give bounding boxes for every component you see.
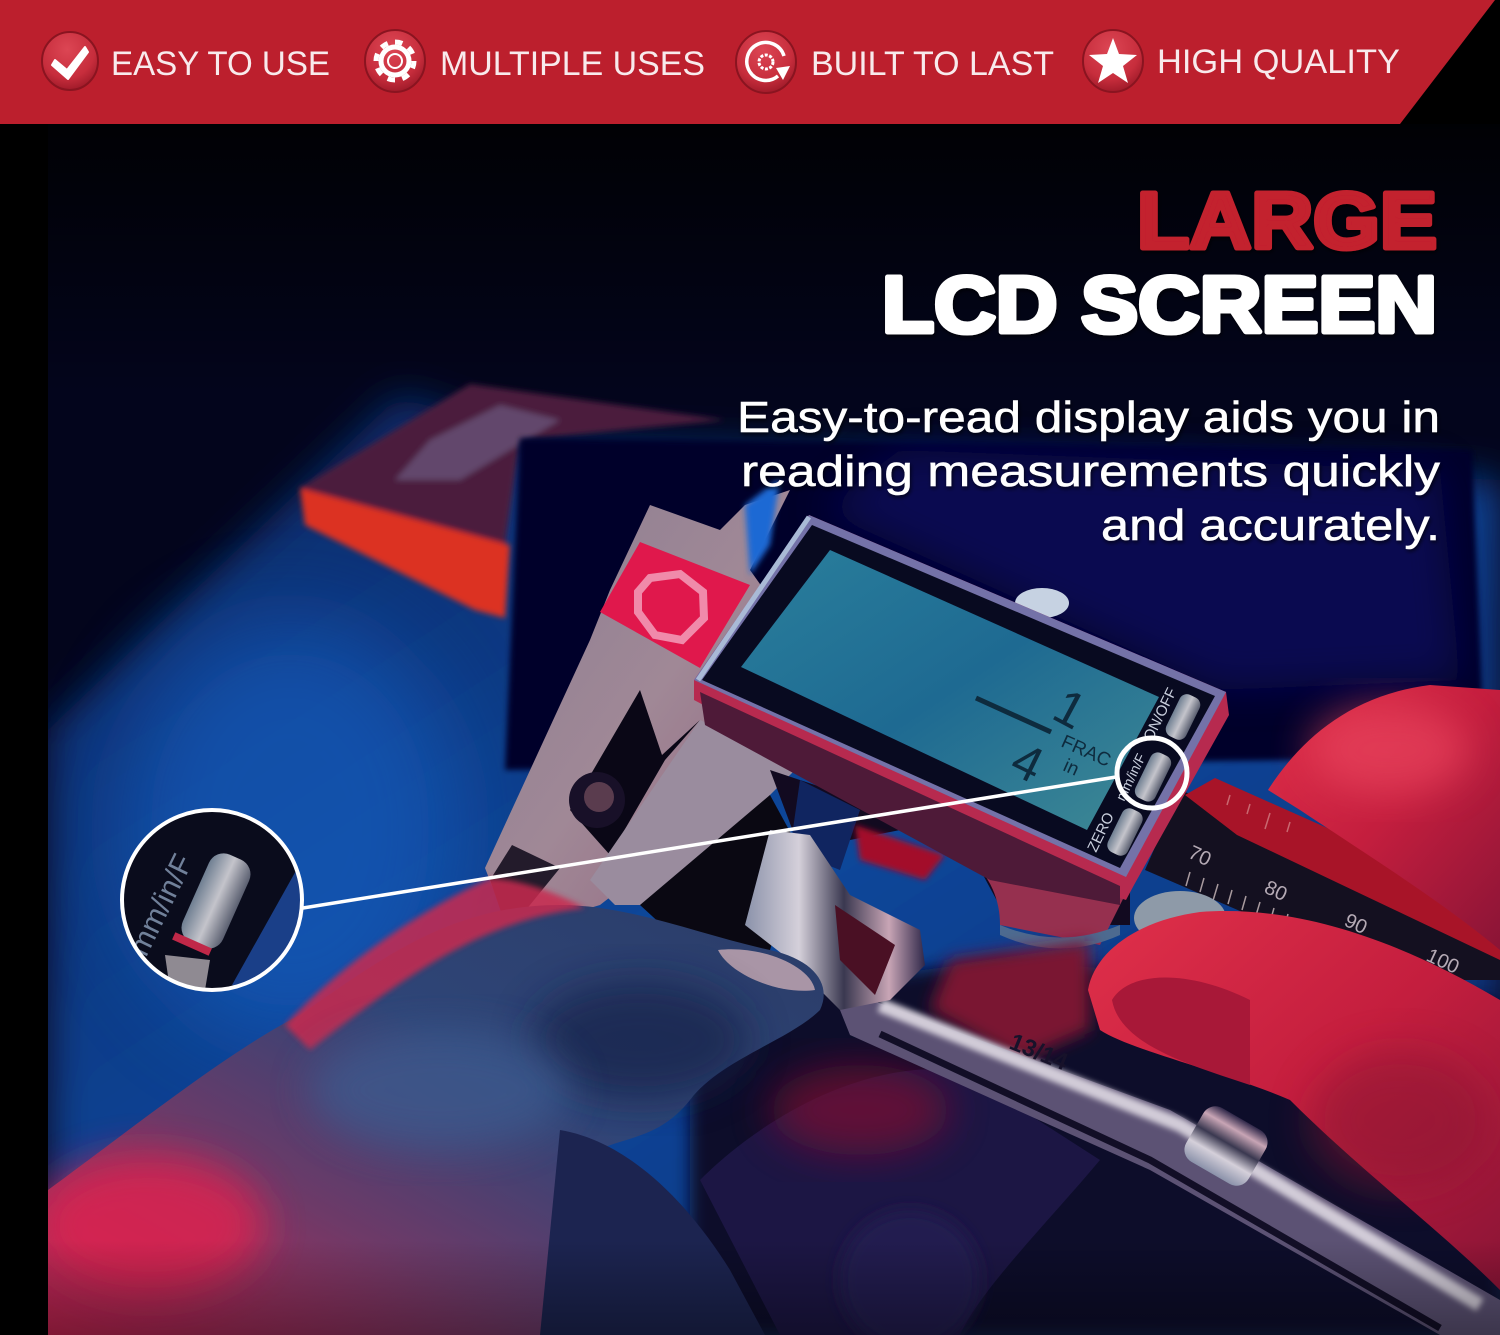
index finger red bbox=[285, 878, 585, 1050]
label: multiple uses: MULTIPLE USES bbox=[440, 45, 705, 83]
heading words LCD SCREEN: LCD SCREEN bbox=[882, 260, 1437, 349]
LCD units: in bbox=[1060, 755, 1082, 781]
ruler numbers: 70 bbox=[1185, 842, 1214, 871]
red box background bbox=[300, 384, 725, 618]
dark lower hand bbox=[700, 1065, 1100, 1335]
locking screw bbox=[569, 772, 625, 828]
bottom shadow over photo bbox=[48, 1240, 1500, 1335]
red logo band bbox=[600, 542, 750, 668]
black case behind caliper bbox=[505, 438, 1482, 770]
dark backdrop bbox=[48, 167, 1500, 1190]
ruler numbers: 90 bbox=[1341, 910, 1370, 939]
thumb shade bbox=[1310, 1050, 1490, 1190]
inset mode label: mm/in/F bbox=[123, 849, 200, 961]
lower hand red glow bbox=[770, 1065, 950, 1155]
palm shadow bbox=[530, 980, 750, 1100]
slide curved foot bbox=[986, 878, 1123, 945]
case navy sheen bbox=[820, 450, 1460, 690]
inset background bbox=[122, 810, 302, 990]
ruler numbers: 100 bbox=[1423, 945, 1462, 979]
inset metal foot bbox=[165, 955, 210, 990]
heading word LARGE: LARGE bbox=[1137, 176, 1437, 265]
description text: and accurately. bbox=[1101, 501, 1440, 550]
upper finger highlight bbox=[1310, 705, 1470, 795]
ruler ticks on red bbox=[1227, 795, 1290, 832]
inset right edge bbox=[232, 860, 320, 990]
LCD reading bbox=[1012, 693, 1081, 782]
lower right dark shadow bbox=[690, 960, 1500, 1335]
blue gap below display bbox=[790, 780, 860, 870]
centre blue glow bbox=[310, 1030, 570, 1150]
LCD fraction line bbox=[976, 698, 1051, 732]
magnified button inset bbox=[122, 810, 320, 990]
rim left highlight bbox=[698, 517, 809, 680]
ruler numbers bbox=[1185, 842, 1462, 979]
red ruler strip bbox=[1185, 778, 1500, 960]
inset button bbox=[176, 848, 256, 954]
lower finger bbox=[540, 1130, 765, 1335]
shaft dark line bbox=[880, 1034, 1440, 1328]
housing rim bbox=[694, 515, 1226, 877]
red glow behind wrench bbox=[930, 940, 1090, 1060]
main hand shape bbox=[48, 905, 824, 1335]
red-lit metal under display bbox=[770, 770, 1130, 925]
fingernail bbox=[718, 949, 815, 991]
LCD reading: 4 bbox=[1003, 731, 1052, 794]
ON/OFF button bbox=[1163, 692, 1203, 742]
icon: gear bbox=[365, 30, 425, 92]
wrench size marking: 13/14 bbox=[1006, 1029, 1072, 1076]
bright fabric highlight bbox=[120, 620, 460, 1040]
caliper body bbox=[485, 478, 1500, 1060]
upper jaw metal bbox=[485, 490, 800, 932]
left hand bbox=[35, 878, 824, 1335]
inset red reflection bbox=[172, 932, 212, 956]
main rail with ruler bbox=[1145, 790, 1500, 980]
description text bbox=[737, 393, 1440, 550]
lower hand finger bbox=[840, 1210, 980, 1335]
wrench jaw opening bbox=[835, 905, 895, 995]
label: built to last: BUILT TO LAST bbox=[811, 45, 1054, 83]
ruler markings bbox=[1185, 872, 1289, 916]
red banner bbox=[0, 0, 1495, 124]
thumb bbox=[1088, 911, 1500, 1290]
button labels bbox=[1084, 685, 1180, 855]
lower hand shape bbox=[700, 1069, 1100, 1335]
wrench head bbox=[745, 830, 925, 1010]
description text: Easy-to-read display aids you in bbox=[737, 393, 1440, 442]
wrench shaft bbox=[830, 985, 1500, 1335]
label: easy to use: EASY TO USE bbox=[111, 45, 330, 83]
description text: reading measurements quickly bbox=[741, 447, 1440, 496]
LCD units: FRAC bbox=[1058, 731, 1114, 772]
ZERO button bbox=[1105, 806, 1145, 858]
dark slide opening bbox=[640, 795, 790, 950]
shaft highlight bbox=[880, 1005, 1480, 1305]
roller wheel bbox=[1134, 891, 1224, 930]
button labels: ZERO bbox=[1084, 810, 1118, 855]
icon: cycle gear bbox=[736, 31, 796, 93]
button labels: mm/in/F bbox=[1112, 751, 1149, 803]
lower red glow bbox=[35, 1155, 265, 1295]
upper finger bbox=[1268, 685, 1500, 950]
hexagon logo bbox=[638, 574, 704, 640]
callout ring on button bbox=[1117, 738, 1187, 808]
right hand bbox=[1088, 685, 1500, 1290]
thumbnail bbox=[1112, 978, 1250, 1085]
jaw slot bbox=[570, 690, 700, 855]
banner: features bbox=[0, 0, 1495, 124]
display housing bbox=[694, 515, 1229, 900]
ruler numbers: 80 bbox=[1261, 877, 1290, 906]
jaw lower metal bbox=[590, 720, 800, 905]
lower jaw tip bbox=[490, 845, 560, 910]
label: high quality: HIGH QUALITY bbox=[1157, 43, 1400, 81]
red reflection bbox=[855, 825, 945, 880]
mode button bbox=[1132, 750, 1174, 804]
thumb roller edge bbox=[1000, 925, 1120, 948]
icon: checkmark bbox=[42, 32, 98, 90]
housing side reflection bbox=[700, 692, 1120, 905]
display bezel bbox=[702, 525, 1215, 868]
button labels: ON/OFF bbox=[1140, 685, 1180, 744]
wrench collar bbox=[1179, 1101, 1273, 1191]
top shadow over photo bbox=[48, 124, 1500, 394]
heading bbox=[882, 176, 1437, 349]
top screw knob bbox=[1015, 588, 1069, 618]
icon: star bbox=[1083, 30, 1143, 92]
callout line bbox=[303, 777, 1116, 908]
wrench bbox=[745, 830, 1500, 1335]
LCD screen bbox=[741, 550, 1159, 830]
blue fabric surface bbox=[48, 395, 1500, 1335]
LCD reading: 1 bbox=[1045, 678, 1095, 740]
jaw blue edge bbox=[745, 478, 780, 575]
inset ring bbox=[122, 810, 302, 990]
